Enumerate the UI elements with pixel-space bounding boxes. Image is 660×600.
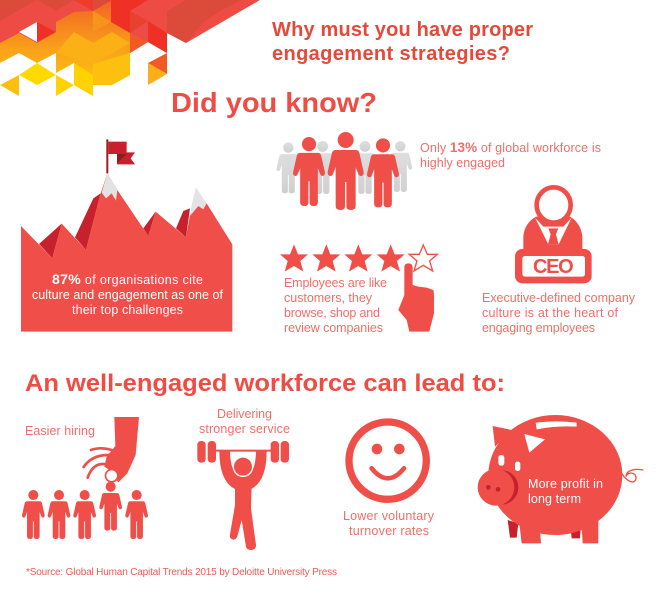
icon: piggy bank: [478, 415, 643, 543]
text: 13% statistic: [420, 140, 601, 170]
text: lower voluntary turnover: [343, 509, 435, 538]
text: 13% statistic: Only 13% of global workforce is: [420, 140, 601, 155]
title: Why must you have proper: [272, 19, 533, 41]
icon: group of people: [277, 132, 412, 210]
text: employees are like customers: review companies: [284, 321, 383, 335]
heading: did you know: Did you know?: [171, 87, 377, 118]
icon: weightlifter: [197, 441, 289, 550]
icon: mountains with flag: [21, 139, 232, 332]
text: 13% statistic: highly engaged: [420, 156, 505, 170]
text: 87% statistic: culture and engagement as one of: [32, 288, 224, 302]
title: engagement strategies?: [272, 43, 510, 65]
text: employees are like customers: browse, shop and: [284, 306, 380, 320]
panel: more profit: [478, 415, 643, 543]
text: executive-defined culture: Executive-defined company: [482, 291, 636, 305]
text: more profit in long term: More profit in: [528, 477, 603, 491]
text: employees are like customers: [284, 276, 387, 335]
text: easier hiring: Easier hiring: [25, 424, 95, 438]
icon: stars and pointing hand: [280, 244, 437, 332]
panel: mountain statistic: [21, 139, 232, 332]
panel: easier hiring: [22, 417, 148, 539]
icon: smiley face: [349, 422, 426, 499]
text: 87% statistic: [32, 271, 224, 317]
text: more profit in long term: [528, 477, 603, 506]
text: delivering stronger service: Delivering: [217, 407, 272, 421]
panel: lower turnover: [343, 422, 435, 538]
text: employees are like customers: customers, they: [284, 291, 373, 305]
panel: CEO culture: [482, 187, 636, 335]
text: lower voluntary turnover: turnover rates: [349, 524, 429, 538]
icon: CEO badge: CEO: [533, 256, 574, 278]
icon: CEO badge: [515, 187, 592, 283]
decorative triangle mosaic: [0, 0, 260, 96]
text: delivering stronger service: stronger service: [199, 422, 290, 436]
text: executive-defined culture: [482, 291, 636, 335]
panel: stronger service: [197, 407, 290, 550]
source note: *Source: Global Human Capital Trends 2015 by Deloitte University Press: [26, 567, 337, 578]
text: 87% statistic: 87% of organisations cite: [52, 271, 203, 287]
text: employees are like customers: Employees are like: [284, 276, 387, 290]
text: delivering stronger service: [199, 407, 290, 436]
icon: hand picking a person from a row: [22, 417, 148, 539]
heading: well-engaged workforce: An well-engaged workforce can lead to:: [25, 370, 505, 397]
panel: engaged workforce: [277, 132, 601, 210]
panel: star reviews: [280, 244, 437, 335]
text: 87% statistic: their top challenges: [72, 303, 183, 317]
text: lower voluntary turnover: Lower voluntary: [343, 509, 435, 523]
text: executive-defined culture: culture is at the heart of: [482, 306, 619, 320]
text: more profit in long term: long term: [528, 492, 581, 506]
text: executive-defined culture: engaging employees: [482, 321, 595, 335]
title: [272, 19, 533, 65]
